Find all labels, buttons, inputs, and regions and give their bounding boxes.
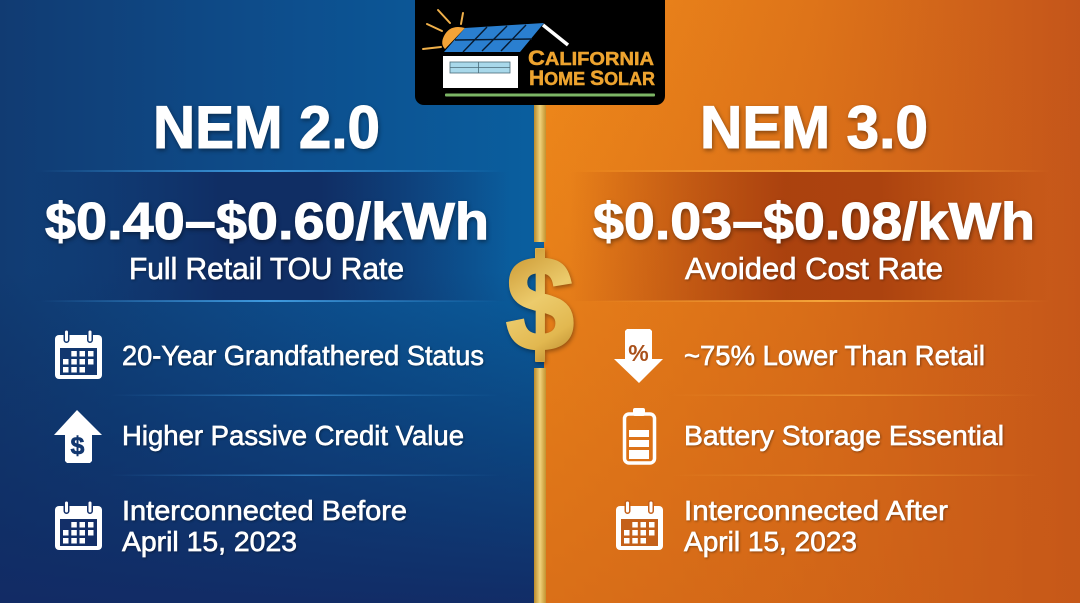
item: interconnected after	[684, 495, 948, 557]
icon: up arrow with dollar: $	[71, 432, 85, 460]
icon: calendar (left, row 3)	[55, 503, 102, 550]
logo sun	[423, 10, 465, 49]
icon: calendar (right)	[616, 503, 663, 550]
logo wordmark	[528, 47, 655, 90]
logo house	[443, 56, 518, 88]
logo wordmark: CALIFORNIA	[528, 47, 654, 70]
logo roof edge	[543, 25, 568, 45]
item: interconnected before: Interconnected Before	[122, 495, 407, 526]
logo wordmark: HOME SOLAR	[529, 67, 655, 90]
item: interconnected after: Interconnected After	[684, 495, 948, 526]
item: interconnected before	[122, 495, 407, 557]
panel: NEM 3.0 background	[544, 0, 1080, 603]
center gold divider	[534, 100, 546, 603]
icon: down arrow with percent	[614, 329, 663, 383]
logo: California Home Solar	[415, 0, 665, 105]
item: interconnected after: April 15, 2023	[684, 526, 857, 557]
item: interconnected before: April 15, 2023	[122, 526, 297, 557]
logo green underline	[445, 94, 655, 96]
item: grandfathered status: 20-Year Grandfathered Status	[122, 340, 484, 371]
heading: NEM 3.0: NEM 3.0	[700, 94, 928, 161]
icon: gold dollar sign: $	[506, 230, 574, 379]
icon: down arrow with percent: %	[628, 340, 649, 366]
icon: battery	[624, 408, 654, 463]
panel: NEM 2.0 background	[0, 0, 544, 603]
item: lower than retail: ~75% Lower Than Retail	[684, 340, 985, 371]
price: NEM 2.0 rate: $0.40–$0.60/kWh	[45, 193, 489, 251]
subheading: avoided cost: Avoided Cost Rate	[685, 251, 943, 286]
icon: up arrow with dollar	[54, 410, 102, 463]
subheading: full retail: Full Retail TOU Rate	[129, 251, 404, 286]
logo roof solar panels	[444, 23, 544, 52]
icon: calendar (left, row 1)	[55, 332, 102, 379]
price: NEM 3.0 rate: $0.03–$0.08/kWh	[593, 193, 1035, 251]
heading: NEM 2.0: NEM 2.0	[153, 94, 380, 161]
item: passive credit: Higher Passive Credit Value	[122, 420, 464, 451]
item: battery storage: Battery Storage Essential	[684, 420, 1004, 451]
